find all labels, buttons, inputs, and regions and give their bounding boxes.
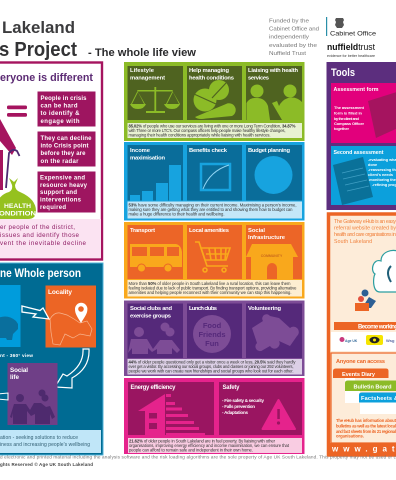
icon: two people <box>246 84 302 120</box>
arrow: social life inlet <box>0 393 8 400</box>
tile: finance, piggy bank <box>0 285 20 347</box>
icon: coin <box>254 156 292 194</box>
funding note: Nuffield Trust <box>269 51 306 57</box>
tile: social clubs and exercise groups: exercise groups <box>130 314 171 320</box>
callout: expensive interventions <box>38 172 96 212</box>
tile: local amenities: Local amenities <box>189 228 229 234</box>
funding note <box>269 18 319 57</box>
icon: people at laptop <box>355 290 376 311</box>
text block: income: 53% have some difficulty managing on their current income. Maximising a person's income, <box>128 202 296 208</box>
icon: puzzle pieces <box>252 314 299 351</box>
text block: ehub information: The eHub has information about <box>336 418 396 423</box>
icon: map pin <box>75 303 87 323</box>
tile: lifestyle management <box>128 66 183 120</box>
heading: the whole person: ne Whole person <box>0 268 81 280</box>
tile: energy efficiency: Energy efficiency <box>130 385 176 391</box>
icon: check box <box>201 164 230 190</box>
panel: social clubs (purple) <box>124 300 304 376</box>
card: second assessment <box>331 146 396 205</box>
panel: transport and local (orange) <box>124 222 304 298</box>
panel: lifestyle and health (green) <box>124 62 304 141</box>
logo: Nuffield Trust <box>327 42 375 58</box>
text block: fuel poverty: 21.62% of older people in South Lakeland are in fuel poverty. By liaising with other <box>129 438 276 444</box>
tile: liaising with health services: services <box>248 76 269 82</box>
tile: safety: Safety <box>222 385 240 391</box>
tile: social infrastructure <box>246 225 302 279</box>
icon: warning triangle <box>262 400 295 429</box>
icon: plate <box>193 315 231 353</box>
tile: income maximisation <box>128 145 183 200</box>
tile: help managing health conditions <box>187 66 242 120</box>
heading: tools: Tools <box>331 67 355 79</box>
callout: hard to identify: engage with <box>40 119 80 125</box>
text block: fuel poverty: organisations, improving energy efficiency and income maximisation, we can ensure that <box>129 443 290 448</box>
text block: gateway intro: The Gateway eHub is an easy <box>334 219 396 225</box>
icon: equals sign <box>7 106 27 117</box>
button: bulletin board: Bulletin Board <box>354 384 392 390</box>
second assessment list: -monitoring the <box>368 178 396 182</box>
tile: income maximisation: Income <box>130 148 151 154</box>
tile: energy efficiency <box>128 382 214 435</box>
logo: Nuffield Trust: evidence for better healthcare <box>327 54 375 58</box>
text block: early identification: er people of the district, <box>0 224 75 231</box>
caption: 360 view: nt - 360° view <box>0 353 33 359</box>
tile: budget planning <box>246 145 302 200</box>
tile: benefits check <box>187 145 242 200</box>
title: Lakeland <box>2 18 75 37</box>
icon: shopping cart <box>195 242 230 272</box>
logo: Cabinet Office <box>326 17 376 38</box>
callout: hard to identify: People in crisis <box>40 96 87 102</box>
text block: transport: More than 50% of older people in South Lakeland live a rural location, this can leave them <box>128 281 291 286</box>
tile: social life <box>8 363 58 425</box>
icon: health condition bag <box>0 178 37 219</box>
icon: map outline <box>50 313 92 345</box>
footer: ghts Reserved © Age UK South Lakeland <box>0 461 93 467</box>
text block: wellbeing summary: iness and increasing people's wellbeing <box>0 442 90 448</box>
tile: locality: Locality <box>48 289 72 296</box>
arrow: locality to social life <box>55 349 89 388</box>
callout: expensive interventions: required <box>40 205 66 211</box>
second assessment list: done <box>368 163 377 167</box>
text block: income: make a huge difference to their health and wellbeing. <box>128 212 224 216</box>
card: assessment form: Assessment form <box>334 87 379 93</box>
tile: transport <box>128 225 183 279</box>
assessment form text: by the client and <box>334 116 360 121</box>
text block: transport: amenities and helping people reconnect with their community we can stop this happening. <box>128 290 292 295</box>
logos: partners: Age UK <box>345 339 358 343</box>
tile: safety <box>219 382 302 435</box>
text block: wellbeing summary <box>0 430 101 453</box>
text block: gateway intro <box>334 219 396 245</box>
text block: gateway intro: referral website created by <box>334 226 396 232</box>
callout: decline into crisis: They can decline <box>40 136 92 142</box>
title: - The whole life view <box>88 47 196 59</box>
panel: the whole person <box>0 263 103 455</box>
tile: liaising with health services: Liaising with health <box>248 68 298 74</box>
arrow: finance to locality <box>22 306 49 319</box>
funding note: Funded by the <box>269 18 309 24</box>
text block: transport <box>128 280 302 296</box>
icon: plate: Fun <box>205 339 219 348</box>
footer: d electronic and printed material including the analysis software and the risk loading algorithms are the sole property of Age UK South Lakeland. This property may not be used or c <box>0 454 396 460</box>
safety list <box>222 398 264 415</box>
card: anyone can access <box>331 353 396 443</box>
text block: early identification <box>0 219 101 258</box>
icon: cloud <box>373 250 396 292</box>
text block: gateway intro: South Lakeland <box>334 239 372 245</box>
funding note: independently <box>269 34 309 40</box>
text block: wellbeing summary: ation - seeking solutions to reduce <box>0 435 78 441</box>
logos: partners: Wsg <box>386 338 395 343</box>
tile: budget planning: Budget planning <box>248 148 290 154</box>
text block: social <box>128 359 302 374</box>
icon: document <box>333 157 373 205</box>
button: events diary: Events Diary <box>342 372 376 378</box>
tile: social clubs and exercise groups <box>128 304 183 358</box>
callout: decline into crisis: on the radar <box>40 159 79 165</box>
icon: bus <box>130 244 182 272</box>
tile: local amenities <box>187 225 242 279</box>
text block: ehub information: bulletins as well as the latest local <box>336 424 396 428</box>
text block: long term conditions: managing their health conditions appropriately while liaising with health services. <box>128 132 270 138</box>
assessment form text: together <box>334 126 349 131</box>
panel: everyone is different <box>0 62 102 260</box>
text block: income <box>128 202 302 218</box>
safety list: - Fire safety & security <box>222 398 264 403</box>
figure: person with cane <box>0 119 20 190</box>
safety list: - Falls prevention <box>222 404 255 409</box>
logo: Nuffield Trust: nuffieldtrust <box>327 42 375 53</box>
callout: hard to identify <box>38 92 96 126</box>
card: assessment form <box>331 83 396 143</box>
text block: transport: feeling isolated due to lack of public transport. By finding transport options, providing alternative <box>128 286 297 290</box>
icon: scales <box>130 87 180 113</box>
panel: tools <box>326 62 396 210</box>
callout: expensive interventions: resource heavy <box>40 183 88 189</box>
tile: lifestyle management: Lifestyle <box>130 68 155 74</box>
icon: two people <box>10 390 55 424</box>
panel: gateway ehub <box>327 214 396 455</box>
funding note: Cabinet Office and <box>269 26 319 32</box>
text block: ehub information: organisations. <box>336 434 364 438</box>
icon: rising bars <box>130 165 181 200</box>
text block: early identification: issues and identify those <box>0 232 80 239</box>
banner: become a working partner <box>334 322 396 330</box>
text block: social: 44% of older people questioned only get a visitor once a week or less, 20.5% said they hardly <box>128 360 296 364</box>
tile: benefits check: Benefits check <box>189 148 228 154</box>
tile: social clubs and exercise groups: Social clubs and <box>130 306 172 312</box>
text block: long term conditions: with Three or more LTC's. Our compass officers help people make healthy lifestyle changes, <box>128 128 286 133</box>
icon: paper form <box>368 91 396 138</box>
tile: lunch clubs <box>187 304 242 358</box>
callout: decline into crisis <box>38 132 96 166</box>
title <box>0 18 196 61</box>
text block: ehub information: and fact sheets from its 21 regional <box>336 429 396 434</box>
heading: everyone is different: eryone is different <box>0 72 93 84</box>
callout: expensive interventions: interventions <box>40 198 82 204</box>
callout: decline into crisis: into Crisis point <box>40 144 88 150</box>
icon: plate: Friends <box>198 330 226 339</box>
text block: gateway intro: health and care organisations in <box>334 232 396 238</box>
footer <box>0 454 396 467</box>
text block: fuel poverty <box>128 438 302 453</box>
funding note: evaluated by the <box>269 43 317 49</box>
text block: early identification: vent the inevitable decline <box>0 240 87 247</box>
text block: ehub information <box>336 418 396 438</box>
second assessment list <box>368 158 396 187</box>
logos: partners <box>331 332 396 351</box>
icon: plate: Food <box>203 321 222 330</box>
callout: hard to identify: can be hard <box>40 104 78 110</box>
panel: energy and safety (magenta) <box>124 378 304 454</box>
tile: volunteering <box>246 304 302 358</box>
assessment form text <box>334 105 365 131</box>
tile: lifestyle management: management <box>130 76 165 82</box>
text block: social: ever get a visitor. By accessing our social groups, clubs and classes or joining our 292 volunteers, <box>128 364 293 369</box>
icon: health condition bag: HEALTH <box>4 203 31 210</box>
tile: social life: Social <box>10 367 28 374</box>
tile: transport: Transport <box>130 228 155 234</box>
icon: house with rating bars <box>138 394 205 435</box>
callout: expensive interventions: Expensive and <box>40 176 85 182</box>
card: anyone can access: Anyone can access <box>336 359 385 365</box>
callout: hard to identify: to identify & <box>40 111 80 117</box>
card: second assessment: Second assessment <box>334 150 384 156</box>
text block: long term conditions: 85.02% of people who use our services are living with one or more Long Term Condition, 34.87% <box>128 124 296 128</box>
tile: help managing health conditions: health conditions <box>189 76 234 82</box>
icon: community building: COMMUNITY <box>261 254 283 258</box>
tile: lunch clubs: Lunch clubs <box>189 306 217 312</box>
tile: help managing health conditions: Help managing <box>189 68 229 74</box>
panel: income (blue) <box>124 142 304 220</box>
tile: liaising with health services <box>246 66 302 120</box>
text block: income: making sure they are getting what they are entitled to and showing them how to budget can <box>128 207 293 212</box>
logo: Cabinet Office: Cabinet Office <box>330 30 376 38</box>
text block: long term conditions <box>128 123 302 138</box>
callout: expensive interventions: support and <box>40 190 77 196</box>
assessment form text: The assessment <box>334 105 365 110</box>
icon: two people <box>128 322 180 354</box>
tile: volunteering: Volunteering <box>248 306 281 312</box>
assessment form text: Compass Officer <box>334 121 364 126</box>
tile: social infrastructure: Social <box>248 228 265 234</box>
safety list: - Adaptations <box>222 410 248 415</box>
title: s Project <box>0 39 77 61</box>
tile: social infrastructure: Infrastructure <box>248 235 286 241</box>
assessment form text: form is filled in <box>334 110 363 116</box>
icon: pills <box>194 80 236 119</box>
tile: social life: life <box>10 374 19 381</box>
second assessment list: client's needs <box>368 173 393 177</box>
tile: income maximisation: maximisation <box>130 156 165 162</box>
callout: decline into crisis: before they are <box>40 151 86 157</box>
text block: social: people we work with can create new friendships and social groups who look out for each other. <box>128 368 294 374</box>
text block: fuel poverty: people can afford to remain safe and independent in their own home. <box>129 448 253 452</box>
tile: locality <box>46 286 96 348</box>
